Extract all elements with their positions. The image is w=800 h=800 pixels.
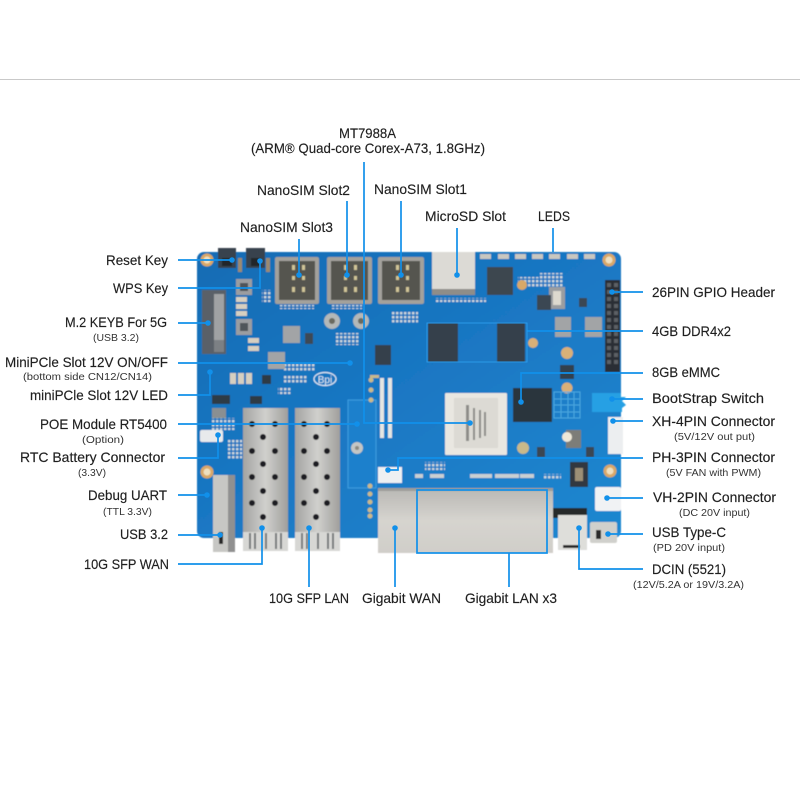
bottom labels: 10G SFP LAN: [269, 590, 349, 606]
bottom labels: Gigabit LAN x3: [465, 590, 557, 606]
top labels: (ARM® Quad-core Corex-A73, 1.8GHz): [251, 140, 485, 156]
VH-2PIN connector: [595, 487, 621, 511]
line: MT7988A: [364, 162, 473, 426]
right labels: BootStrap Switch: [652, 390, 764, 406]
top labels: NanoSIM Slot2: [257, 182, 350, 198]
line: USB Type-C: [605, 531, 643, 537]
line: LEDS: [552, 228, 554, 252]
POE module area: [348, 375, 392, 518]
line: M.2 slot: [178, 320, 211, 326]
Bpi logo: Bpi: [318, 375, 332, 386]
XH-4PIN connector: [608, 417, 623, 454]
SFP cage 1: [243, 408, 288, 551]
top labels: NanoSIM Slot1: [374, 181, 467, 197]
right labels: (5V/12V out put): [674, 431, 755, 443]
DDR4 chips: [428, 323, 525, 362]
left labels: (TTL 3.3V): [103, 506, 152, 518]
right labels: USB Type-C: [652, 524, 726, 540]
left labels: (USB 3.2): [93, 332, 139, 344]
BootStrap switch: [592, 393, 626, 412]
right labels: 8GB eMMC: [652, 364, 720, 380]
small component clusters: [212, 273, 574, 480]
Bpi logo: [314, 372, 336, 386]
line: XH-4PIN: [610, 418, 643, 424]
line: USB 3.2: [178, 532, 223, 538]
left labels: [5, 252, 169, 572]
MT7988A CPU: [445, 393, 507, 455]
right labels: 4GB DDR4x2: [652, 323, 731, 339]
right labels: VH-2PIN Connector: [653, 489, 776, 505]
line: VH-2PIN: [604, 495, 643, 501]
right labels: XH-4PIN Connector: [652, 413, 775, 429]
inductors and power parts: [212, 267, 602, 487]
line: DDR4: [427, 323, 643, 362]
left labels: (3.3V): [78, 467, 106, 479]
USB 3.2 port: [213, 475, 235, 552]
line: Debug UART: [178, 492, 210, 498]
right labels: DCIN (5521): [652, 561, 726, 577]
bottom labels: Gigabit WAN: [362, 590, 441, 606]
left labels: miniPCle Slot 12V LED: [30, 387, 168, 403]
line: PH-3PIN: [385, 458, 643, 473]
left labels: M.2 KEYB For 5G: [65, 314, 167, 330]
eMMC chip: [513, 388, 552, 422]
line: GPIO: [609, 289, 643, 295]
DC barrel jack: [553, 508, 587, 550]
right labels: (DC 20V input): [679, 507, 750, 519]
left labels: 10G SFP WAN: [84, 556, 169, 572]
RTC battery connector: [200, 430, 223, 442]
NanoSIM slots: [275, 257, 424, 304]
left labels: POE Module RT5400: [40, 416, 167, 432]
top labels: LEDS: [538, 208, 570, 224]
left labels: Debug UART: [88, 487, 167, 503]
top labels: MT7988A: [339, 125, 397, 141]
right labels: (5V FAN with PWM): [666, 467, 761, 479]
fan connector: [378, 467, 402, 483]
line: eMMC: [518, 373, 643, 405]
right labels: [633, 284, 776, 591]
left labels: (Option): [82, 434, 124, 446]
right labels: 26PIN GPIO Header: [652, 284, 775, 300]
line: NanoSIM 2: [344, 201, 350, 278]
SFP cage 2: [295, 408, 340, 551]
left labels: Reset Key: [106, 252, 168, 268]
bottom labels: [269, 590, 557, 606]
standoff screws: [324, 313, 369, 329]
line: MicroSD: [454, 228, 460, 278]
top divider line: [0, 79, 800, 80]
line: WPS Key: [178, 258, 263, 288]
left labels: MiniPCle Slot 12V ON/OFF: [5, 354, 168, 370]
line: BootStrap: [609, 396, 643, 402]
line: 10G SFP WAN: [178, 525, 265, 564]
USB Type-C port: [590, 522, 617, 543]
line: Reset Key: [178, 257, 235, 263]
left labels: (bottom side CN12/CN14): [23, 371, 152, 383]
line: DCIN: [576, 525, 643, 569]
left labels: WPS Key: [113, 280, 168, 296]
left labels: RTC Battery Connector: [20, 449, 165, 465]
LED row: [480, 254, 595, 259]
line: POE module: [178, 421, 360, 427]
M.2 slot: [202, 290, 226, 354]
line: NanoSIM 1: [398, 201, 404, 278]
GPIO header: [605, 280, 620, 372]
line: Gigabit WAN: [392, 525, 398, 587]
land grid: [554, 392, 580, 418]
right labels: PH-3PIN Connector: [652, 449, 775, 465]
line: MiniPCIe LED: [178, 369, 213, 395]
line: RTC battery: [178, 432, 221, 458]
board photo: [197, 248, 626, 553]
reset and WPS keys: [218, 248, 270, 272]
top labels: [240, 125, 570, 235]
left labels: USB 3.2: [120, 526, 168, 542]
line: MiniPCIe ON/OFF: [178, 360, 353, 366]
top labels: MicroSD Slot: [425, 208, 506, 224]
MicroSD slot: [432, 252, 475, 295]
right labels: (PD 20V input): [653, 542, 725, 554]
mounting holes: [200, 254, 616, 478]
top labels: NanoSIM Slot3: [240, 219, 333, 235]
line: Gigabit LAN: [417, 490, 547, 587]
line: 10G SFP LAN: [306, 525, 312, 587]
gigabit ethernet block: [378, 488, 553, 553]
PCB: [197, 252, 621, 538]
line: NanoSIM 3: [296, 239, 302, 278]
leader lines and markers: [178, 162, 643, 587]
right labels: (12V/5.2A or 19V/3.2A): [633, 579, 744, 591]
